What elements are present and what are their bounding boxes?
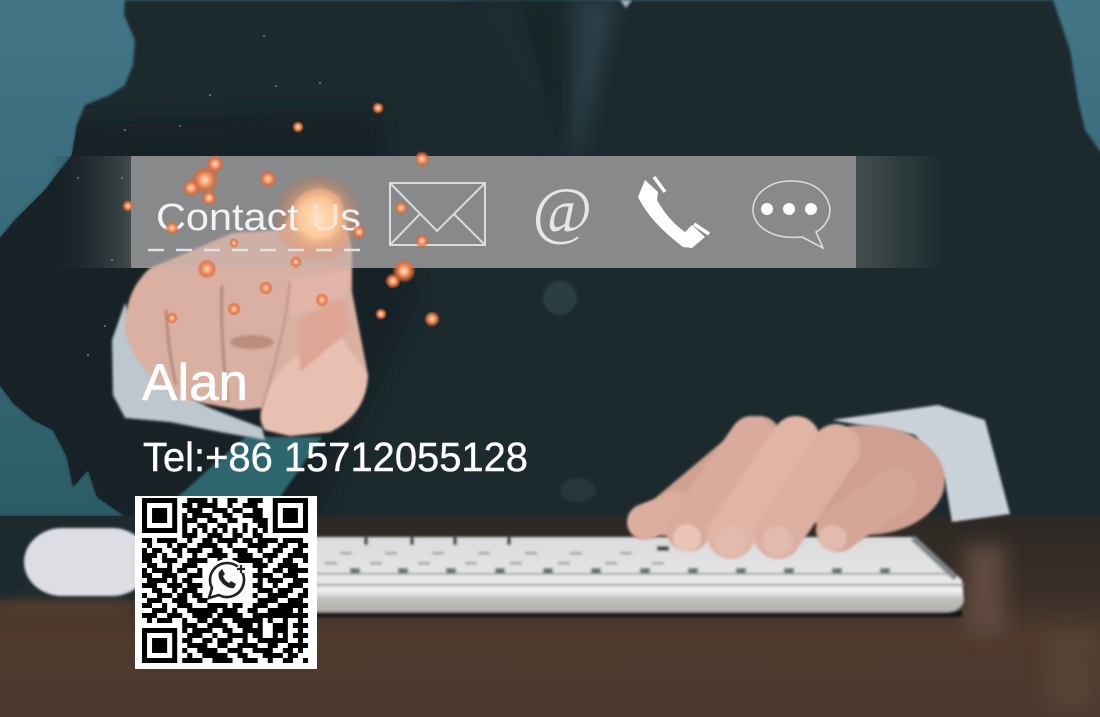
tie and lapels — [470, 0, 575, 160]
bar right fade — [856, 156, 941, 268]
darker left sleeve — [0, 110, 420, 530]
lower jacket button — [560, 478, 596, 502]
pointing hand — [125, 188, 368, 436]
hand under bar — [150, 188, 352, 268]
thumb — [261, 335, 368, 436]
keyboard — [300, 536, 964, 617]
top row gaps — [364, 536, 669, 551]
computer mouse — [24, 528, 150, 596]
fingertip glow — [272, 172, 364, 264]
finger seams — [166, 310, 176, 385]
palm crease — [297, 298, 350, 372]
desk — [0, 516, 1100, 717]
tie highlight — [572, 0, 617, 155]
heading: Contact Us: Contact Us — [156, 197, 361, 239]
phone number: Tel:+86 15712055128 — [143, 434, 528, 480]
WhatsApp QR code — [135, 496, 317, 669]
orange sparkles — [122, 102, 440, 327]
icon: speech bubble — [753, 181, 830, 248]
right hand — [645, 425, 945, 556]
desk left shadow — [0, 516, 150, 600]
contact name: Alan — [142, 354, 248, 412]
jacket button — [543, 281, 577, 315]
bar left fade — [50, 156, 131, 268]
keyboard right rim — [913, 538, 956, 578]
bar main panel — [131, 156, 856, 268]
QR modules — [142, 500, 308, 660]
bottom row gaps — [350, 568, 890, 573]
right shirt cuff — [832, 405, 1010, 522]
suit jacket — [0, 0, 1100, 522]
faint dust specks — [77, 35, 321, 356]
dashed underline — [148, 249, 360, 251]
desk reflections — [0, 545, 1095, 710]
left shirt cuff — [112, 303, 265, 440]
icon: at sign: @ — [532, 175, 592, 247]
teal gap under arm — [150, 437, 322, 520]
icon: envelope — [390, 183, 485, 245]
QR background — [135, 496, 317, 669]
teal wall — [0, 0, 1100, 530]
translucent contact bar — [50, 156, 941, 268]
icon: telephone handset — [638, 177, 709, 248]
key flecks — [325, 552, 664, 564]
shirt glimpse — [620, 0, 632, 8]
knuckle — [230, 335, 274, 349]
QR WhatsApp logo — [206, 559, 248, 601]
